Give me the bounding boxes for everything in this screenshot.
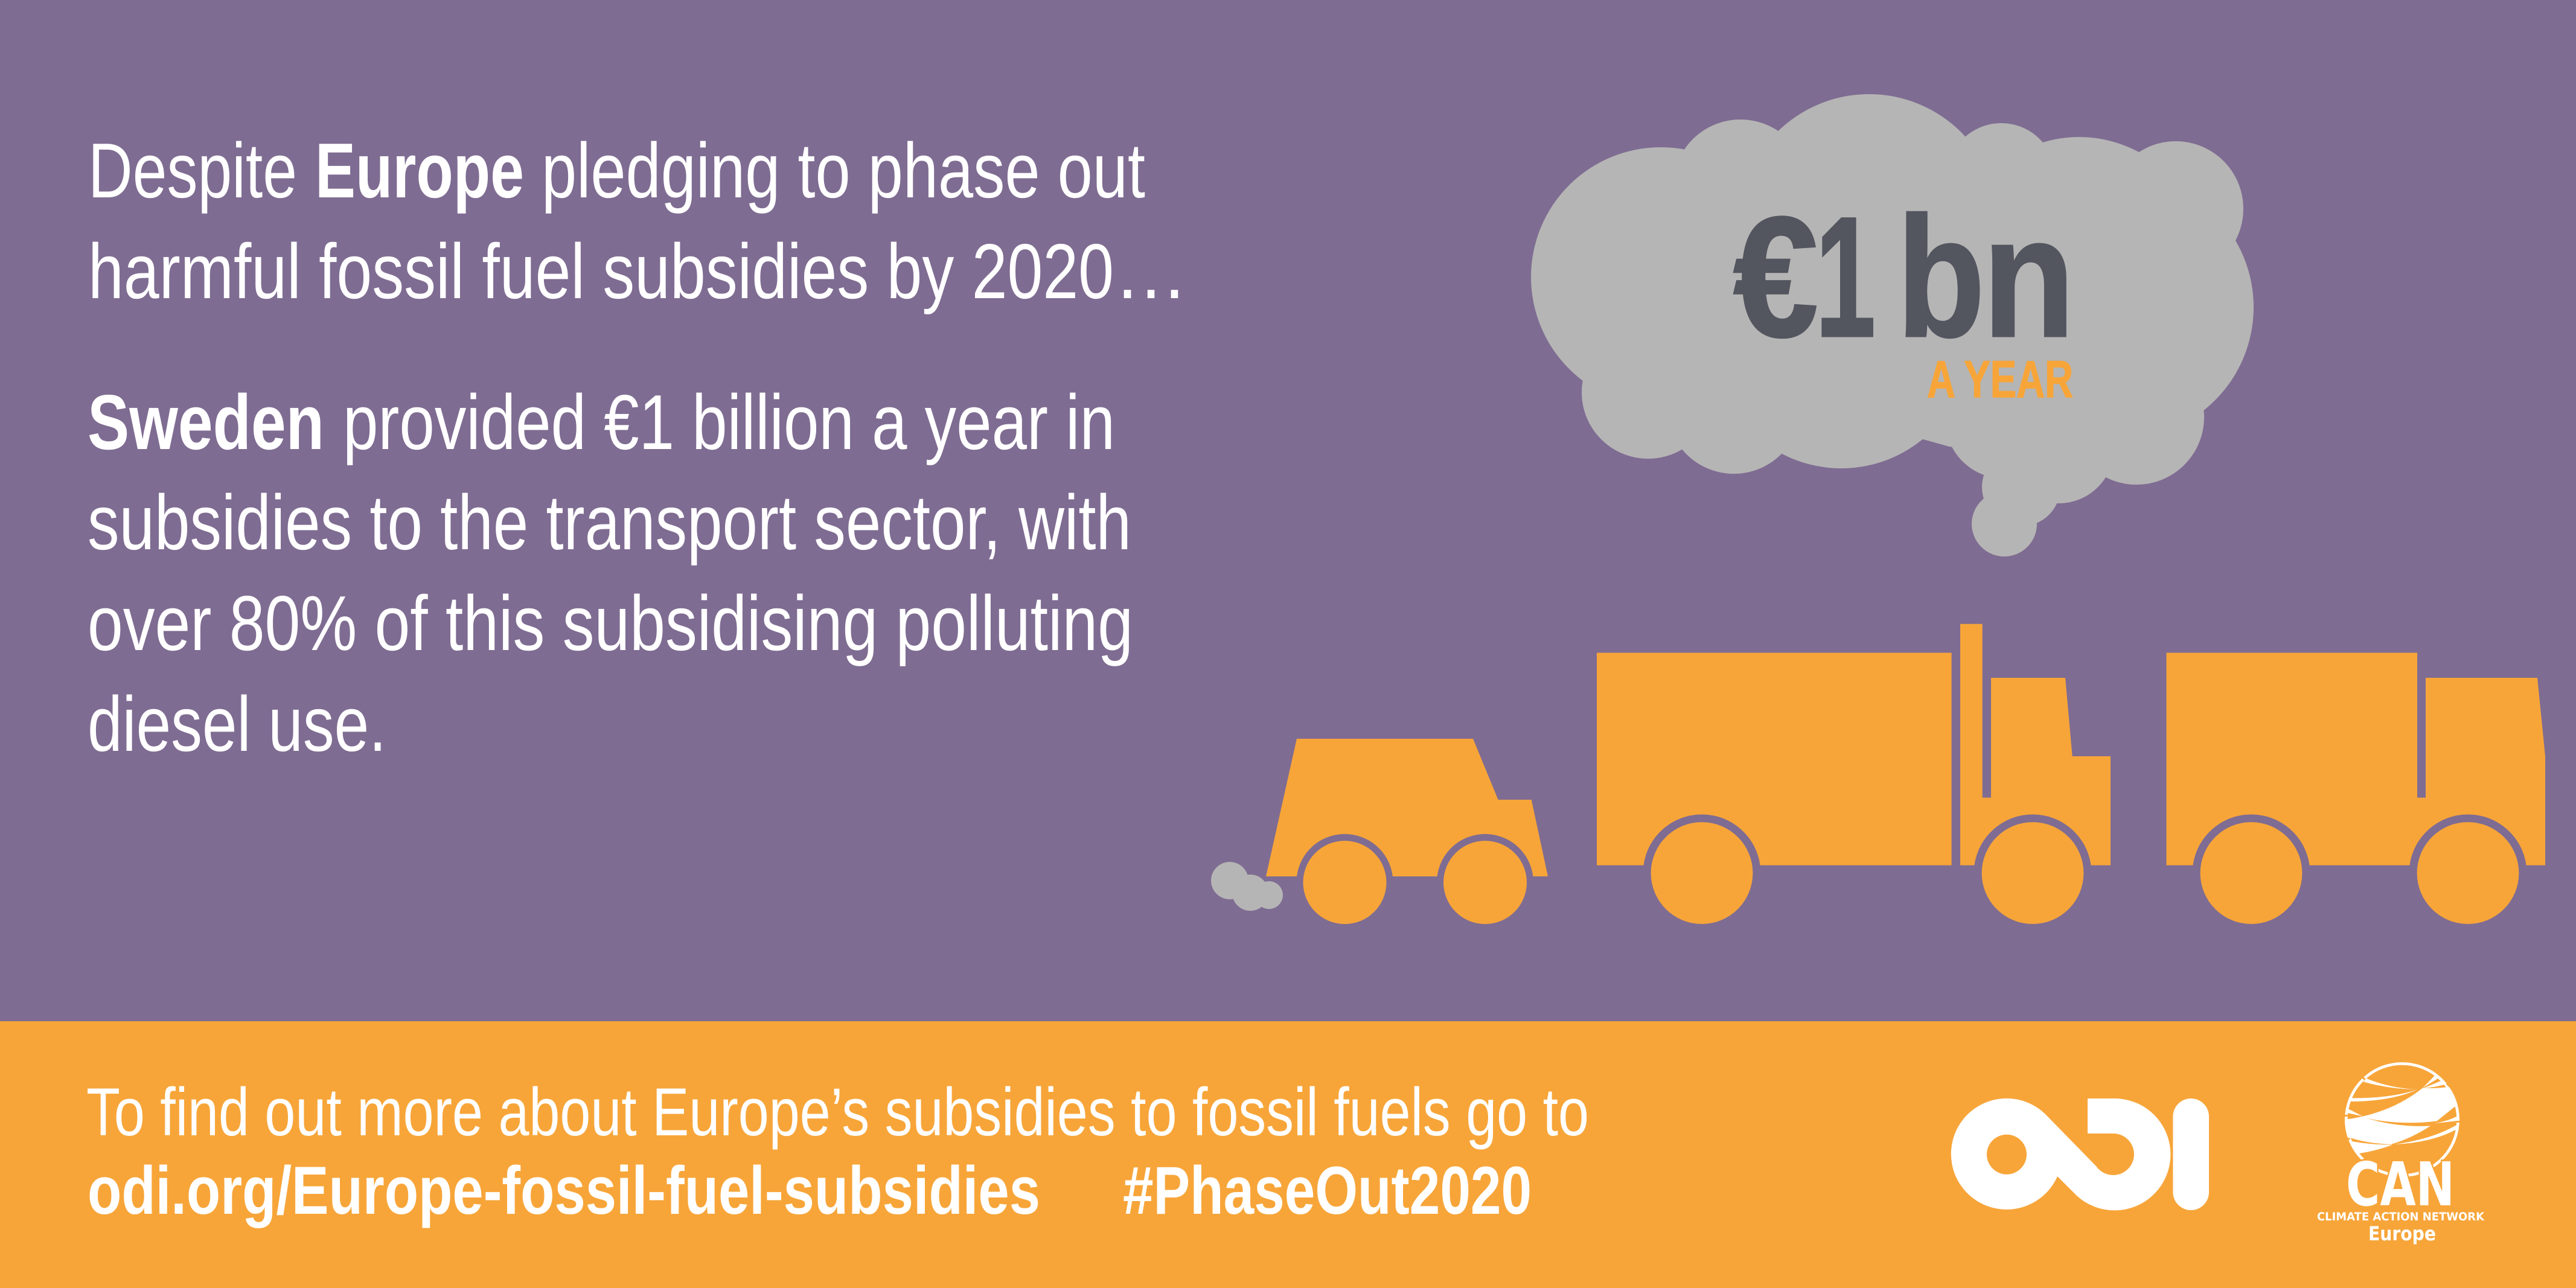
panel: orange footer band xyxy=(0,1021,2576,1288)
text block: Europe pledge: … xyxy=(1114,228,1188,315)
logo: ODI xyxy=(1951,1098,2209,1210)
text block: report link: odi.org/Europe-fossil-fuel-subsidies xyxy=(88,1153,1040,1228)
callout: €1bn amount: € xyxy=(1733,182,1818,373)
callout: €1bn amount: n xyxy=(1983,182,2075,373)
text block: find out more: To find out more about Europe’s subsidies to fossil fuels go to xyxy=(86,1074,1589,1150)
text block: Sweden subsidies: diesel use. xyxy=(88,681,386,768)
text block: Sweden subsidies: Sweden xyxy=(88,379,324,466)
text: Europe: Europe xyxy=(2368,1222,2436,1245)
icon: CAN globe xyxy=(2343,1063,2461,1176)
text block: Europe pledge: harmful fossil fuel subsidies by 2020 xyxy=(88,228,1114,315)
text block: Europe pledge: Despite xyxy=(88,127,297,214)
panel: purple background xyxy=(0,0,2576,1021)
icon: car xyxy=(1266,739,1548,924)
callout: a year label: A YEAR xyxy=(1927,351,2073,409)
icon: smoke cloud xyxy=(1531,94,2254,556)
callout: €1bn amount: 1 xyxy=(1815,182,1876,373)
text block: Europe pledge: Europe xyxy=(315,127,524,214)
text: CAN: CAN xyxy=(2346,1149,2455,1220)
text block: Sweden subsidies: provided €1 billion a year in xyxy=(343,379,1115,466)
callout: €1bn amount xyxy=(1733,182,2075,373)
text block: Sweden subsidies: subsidies to the transport sector, with xyxy=(88,479,1131,566)
text block: Europe pledge: pledging to phase out xyxy=(542,127,1145,214)
icon: van xyxy=(2166,653,2545,924)
icon: lorry with exhaust stack xyxy=(1597,624,2111,924)
text block: hashtag: #PhaseOut2020 xyxy=(1123,1153,1532,1228)
text: Climate Action Network: CLIMATE ACTION NETWORK xyxy=(2317,1210,2485,1223)
logo: Climate Action Network Europe xyxy=(2317,1063,2485,1245)
text block: Sweden subsidies: over 80% of this subsidising polluting xyxy=(88,580,1133,667)
text block: Sweden subsidies xyxy=(88,379,1133,768)
callout: €1bn amount: b xyxy=(1897,182,1985,373)
icon: exhaust smoke xyxy=(1211,862,1283,911)
text block: Europe pledge xyxy=(88,127,1188,315)
